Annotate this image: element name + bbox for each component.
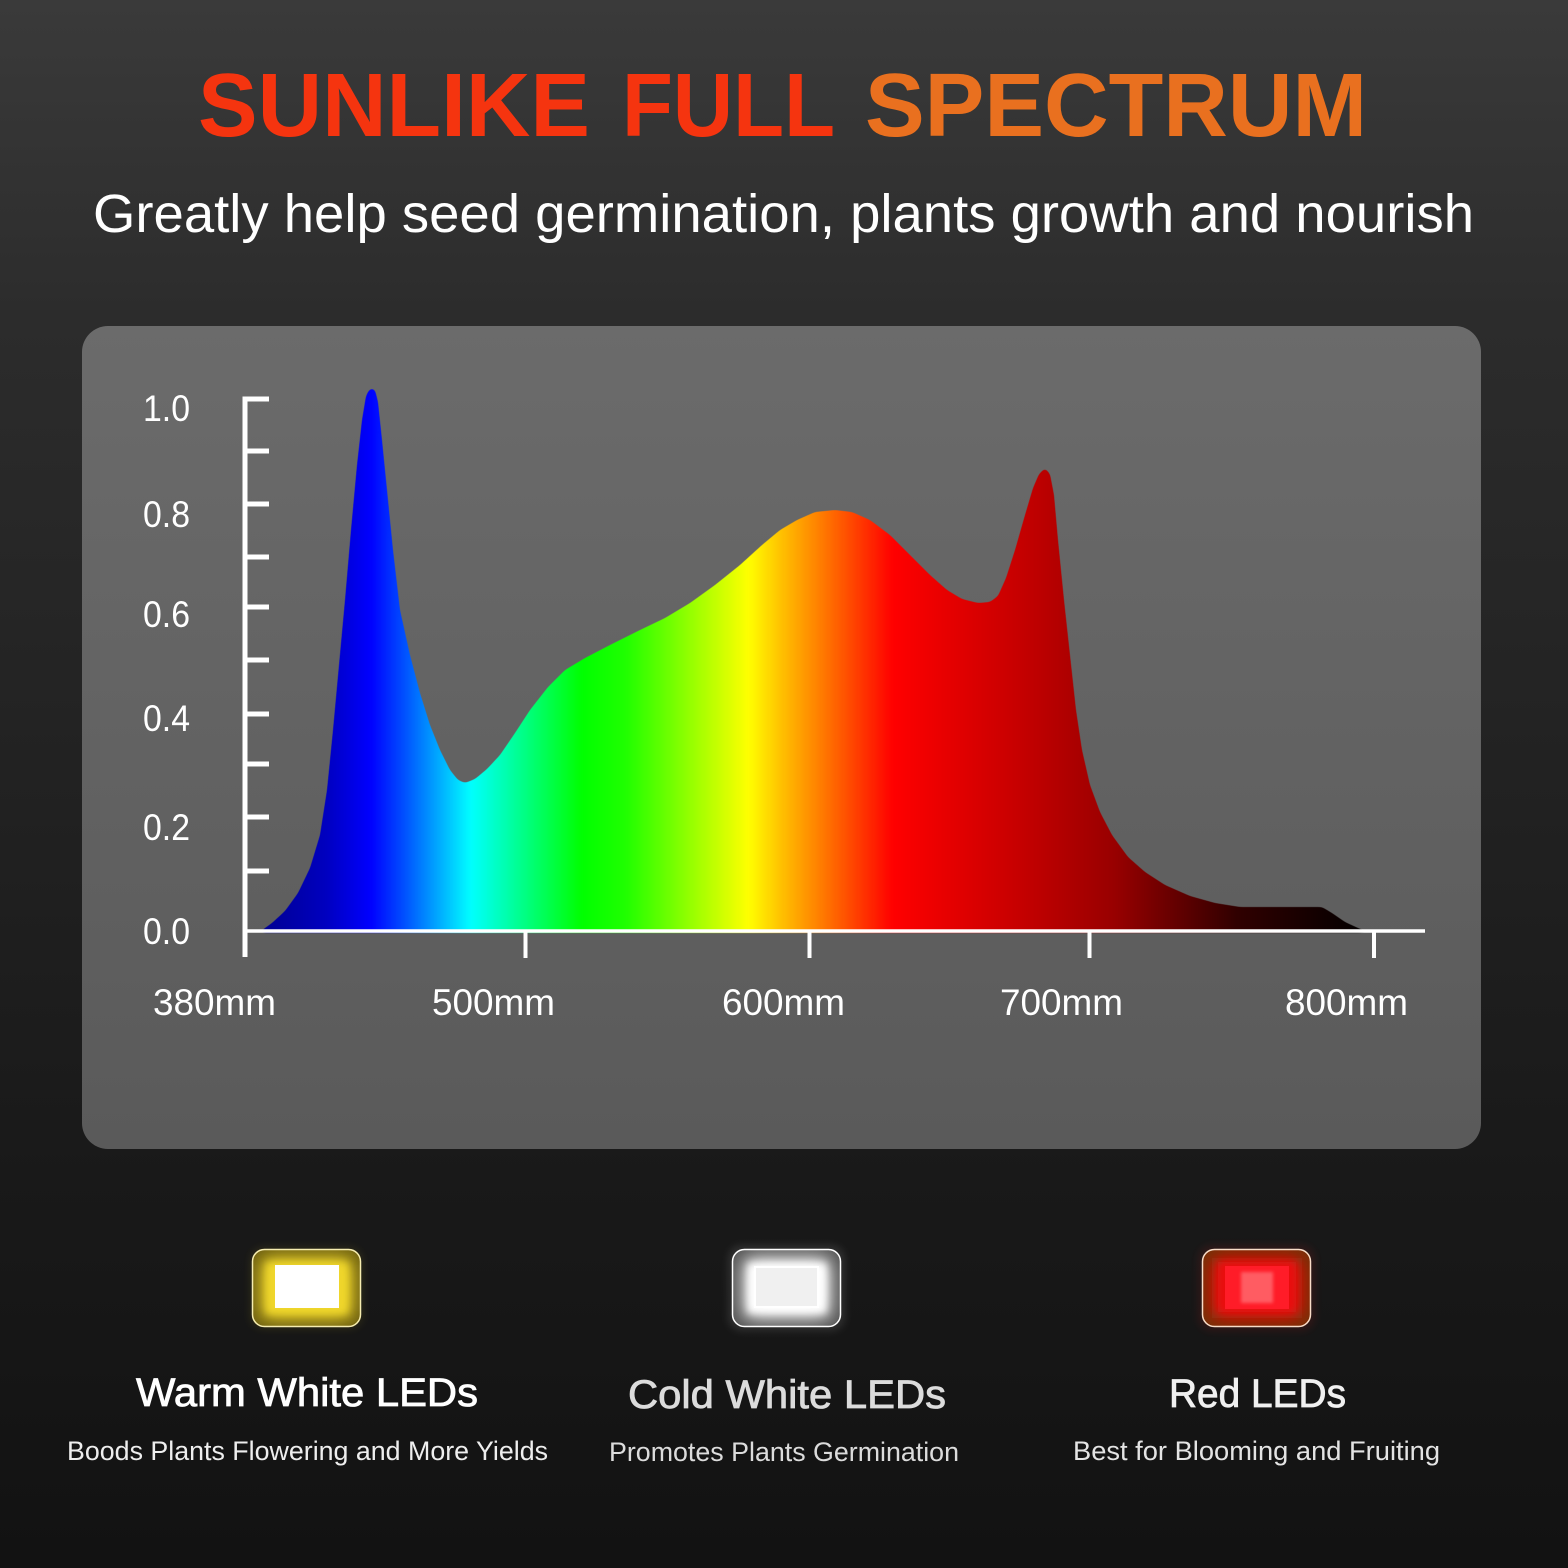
x axis labels: 500mm	[432, 982, 555, 1023]
y axis labels	[143, 388, 190, 952]
legend: warm white	[67, 1371, 548, 1466]
x axis labels: 380mm	[153, 982, 276, 1023]
icon: red LED	[1198, 1245, 1315, 1331]
title: SPECTRUM	[865, 56, 1367, 156]
x axis	[245, 931, 1425, 958]
legend text: cold white: Promotes Plants Germination	[609, 1437, 959, 1467]
legend text: red: Best for Blooming and Fruiting	[1073, 1436, 1440, 1466]
y axis labels: 0.4	[143, 698, 190, 739]
y axis labels: 1.0	[143, 388, 190, 429]
title	[198, 56, 1367, 156]
x axis labels: 800mm	[1285, 982, 1408, 1023]
y axis labels: 0.2	[143, 807, 190, 848]
legend heading: cold white: Cold White LEDs	[628, 1373, 946, 1417]
y axis labels: 0.8	[143, 494, 190, 535]
legend: red	[1073, 1372, 1440, 1466]
subtitle: Greatly help seed germination, plants growth and nourish	[93, 184, 1474, 244]
legend heading: warm white: Warm White LEDs	[136, 1371, 478, 1415]
icon: warm white LED	[250, 1247, 363, 1329]
icon: cold white LED	[728, 1245, 845, 1331]
y axis labels: 0.6	[143, 594, 190, 635]
title: SUNLIKE	[198, 56, 590, 156]
title: FULL	[622, 56, 835, 156]
legend heading: red: Red LEDs	[1169, 1372, 1346, 1416]
panel: spectrum chart	[82, 326, 1481, 1149]
spectrum curve	[258, 388, 1372, 933]
y axis labels: 0.0	[143, 911, 190, 952]
legend: cold white	[609, 1373, 959, 1467]
x axis labels: 700mm	[1000, 982, 1123, 1023]
y axis	[245, 399, 269, 957]
legend text: warm white: Boods Plants Flowering and More Yields	[67, 1436, 548, 1466]
x axis labels: 600mm	[722, 982, 845, 1023]
x axis labels	[153, 982, 1408, 1023]
